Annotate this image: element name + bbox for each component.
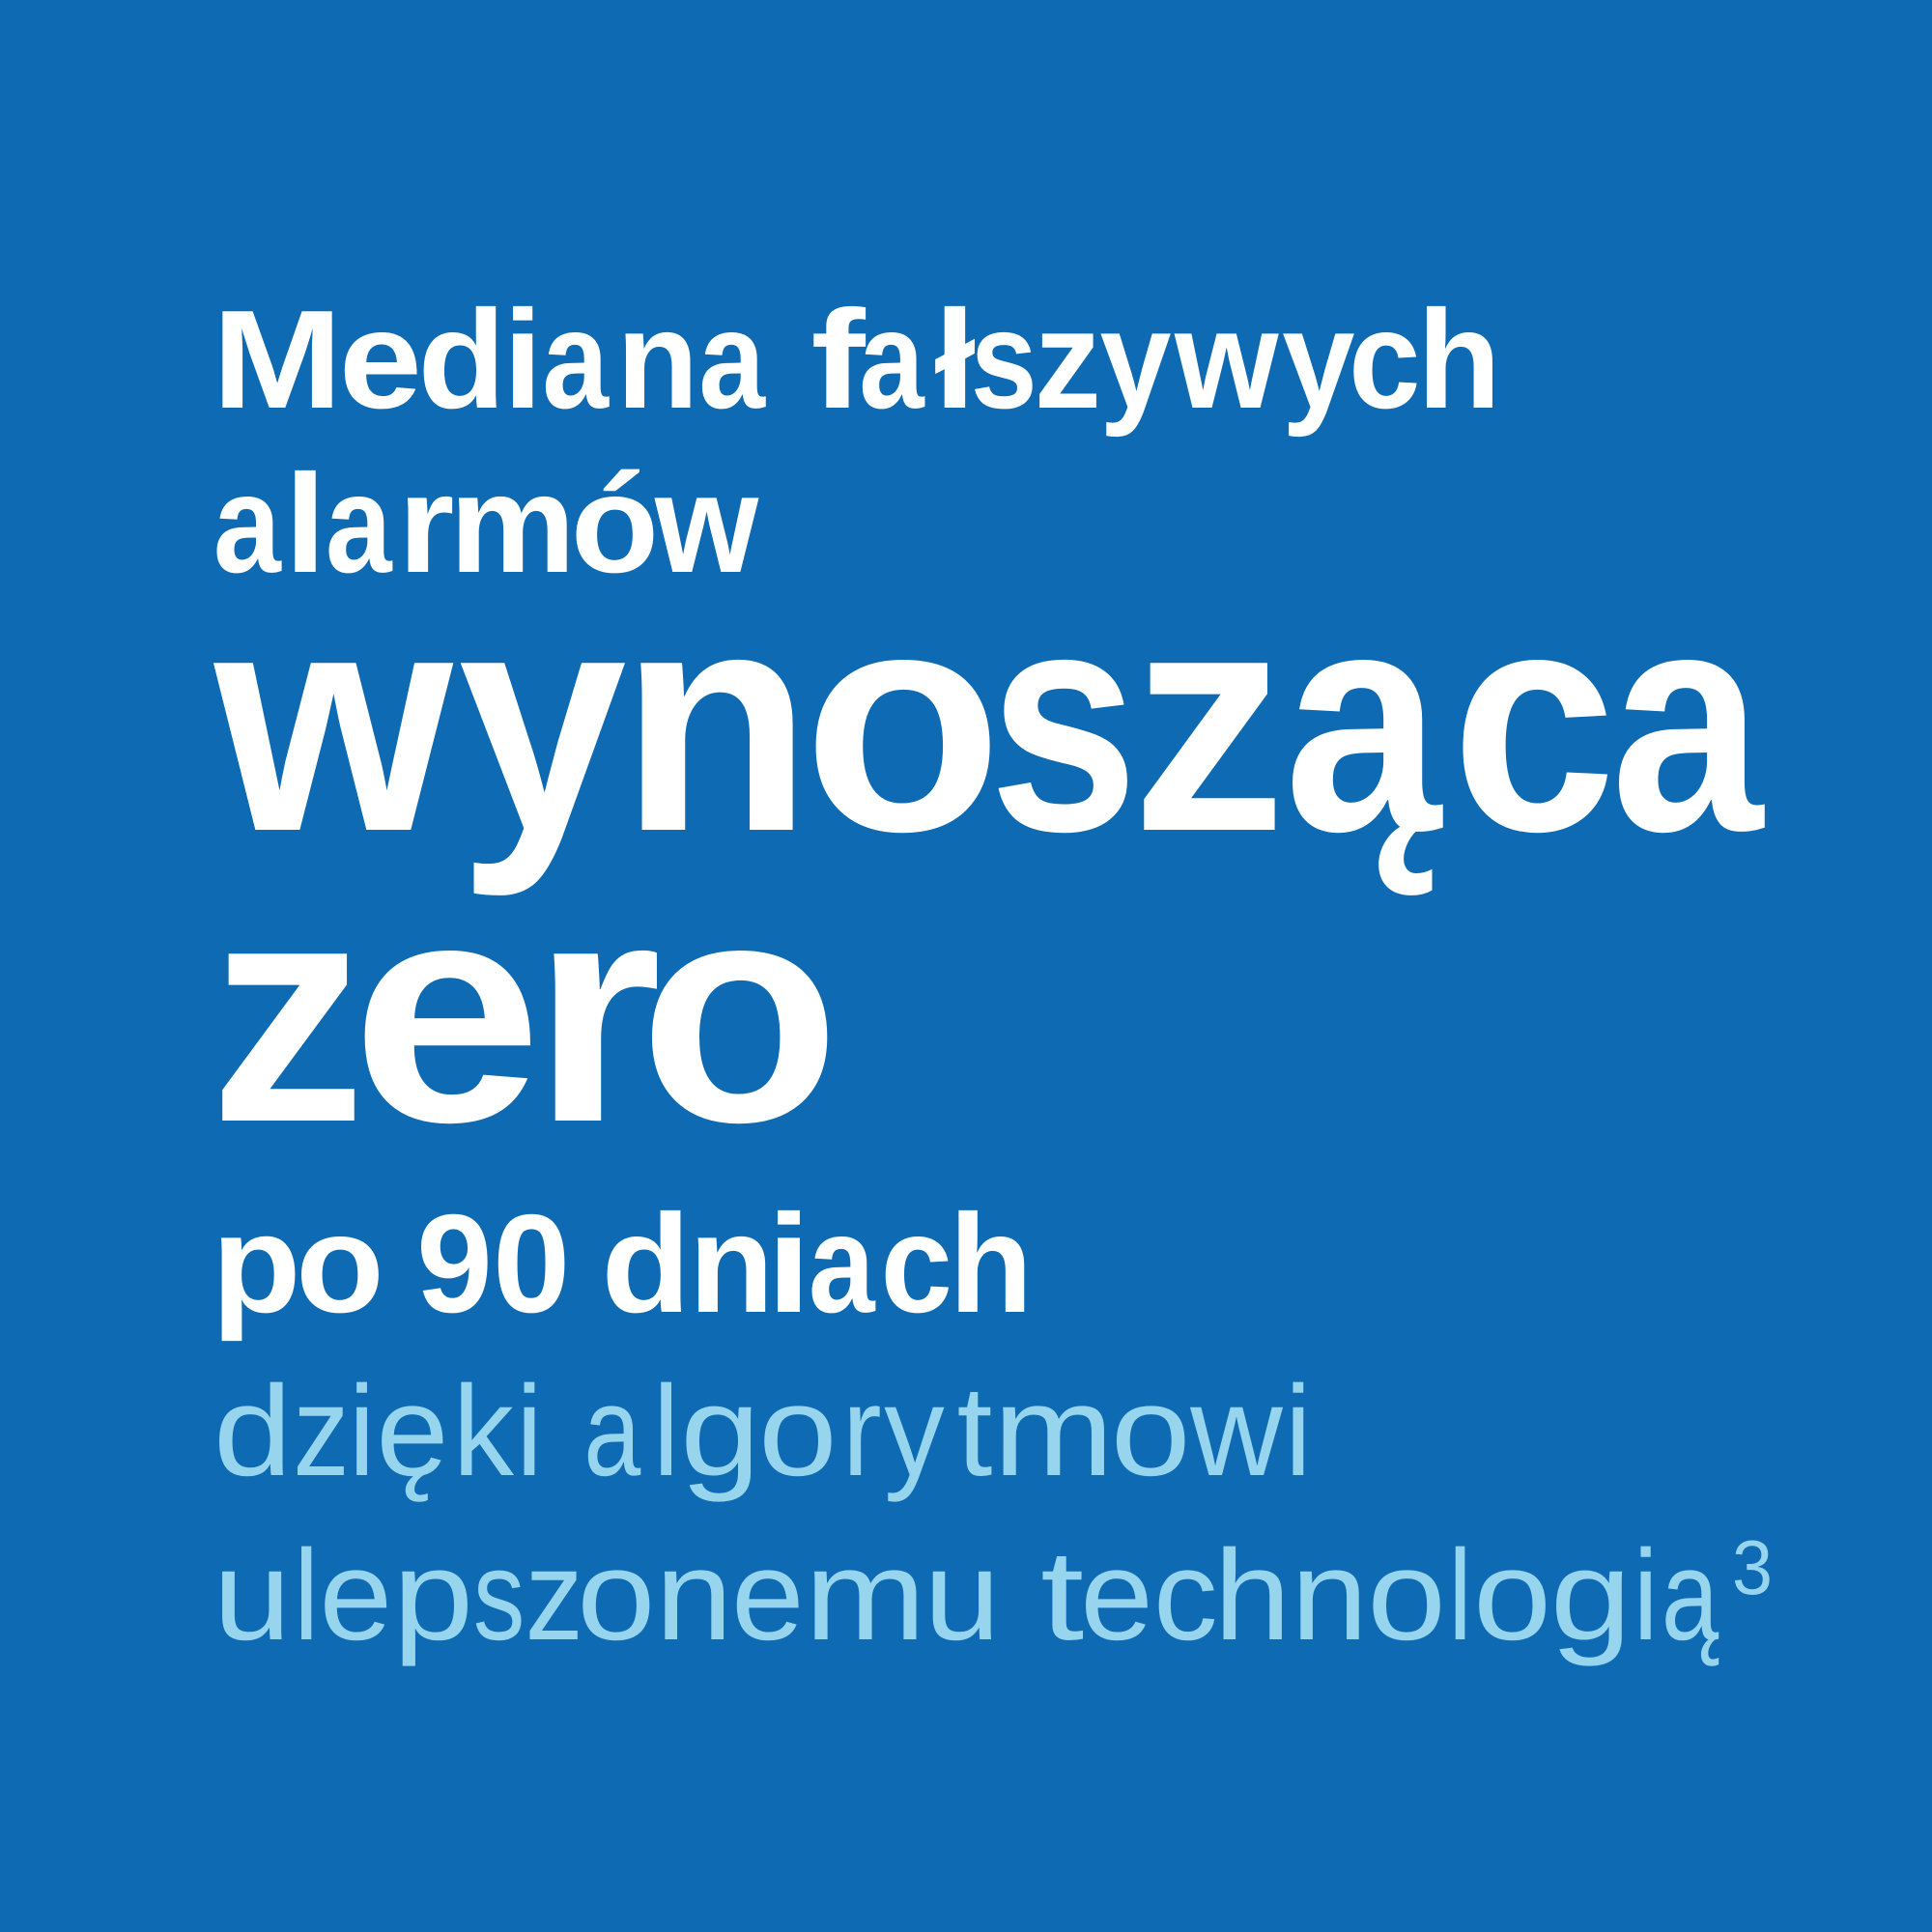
big statement line 1: s bbox=[989, 545, 1138, 897]
light text line 2: o bbox=[1367, 1524, 1446, 1667]
duration text: i bbox=[767, 1185, 811, 1342]
light text line 2: h bbox=[1214, 1524, 1291, 1667]
light text line 2: u bbox=[213, 1524, 291, 1667]
light text line 1: i bbox=[349, 1360, 375, 1503]
heading line 1: ł bbox=[934, 281, 976, 438]
light text line 1: w bbox=[1189, 1360, 1284, 1503]
heading line 2: m bbox=[449, 445, 576, 602]
duration text: o bbox=[296, 1185, 384, 1342]
light text line 2: t bbox=[1040, 1524, 1084, 1667]
light text line 2: o bbox=[1473, 1524, 1551, 1667]
light text line 2: l bbox=[294, 1524, 319, 1667]
big statement line 1: ą bbox=[1285, 545, 1443, 899]
heading line 2: r bbox=[398, 445, 454, 602]
big statement line 1: w bbox=[210, 545, 454, 897]
light text line 1: d bbox=[213, 1360, 292, 1503]
big statement line 1: a bbox=[1611, 545, 1765, 897]
light text line 2: n bbox=[655, 1524, 732, 1667]
heading line 1: a bbox=[859, 281, 925, 438]
heading line 1: h bbox=[1417, 281, 1501, 438]
heading line 1: n bbox=[616, 281, 698, 438]
big statement line 2: r bbox=[532, 836, 662, 1188]
heading line 1: w bbox=[1174, 281, 1280, 438]
big statement line 1: z bbox=[1132, 545, 1286, 897]
light text line 2: c bbox=[1153, 1524, 1218, 1667]
light text line 1: o bbox=[1111, 1360, 1191, 1503]
light text line 2: e bbox=[319, 1524, 392, 1667]
light text line 2: l bbox=[1448, 1524, 1472, 1667]
light text line 1: i bbox=[516, 1360, 543, 1503]
duration text: a bbox=[809, 1185, 876, 1342]
duration text: c bbox=[881, 1185, 952, 1342]
heading line 1: f bbox=[810, 281, 867, 438]
heading line 1: a bbox=[542, 281, 610, 438]
duration text: 9 bbox=[416, 1185, 493, 1342]
light text line 2: i bbox=[1634, 1524, 1659, 1667]
big statement line 2: o bbox=[639, 836, 840, 1188]
heading line 2: w bbox=[654, 445, 759, 602]
light text line 1: k bbox=[453, 1360, 514, 1503]
light text line 1: ę bbox=[376, 1360, 448, 1503]
light text line 1: o bbox=[758, 1360, 838, 1503]
big statement line 2: z bbox=[210, 836, 365, 1188]
heading line 1: e bbox=[339, 281, 422, 438]
light text line 2: e bbox=[1080, 1524, 1153, 1667]
duration text: p bbox=[212, 1185, 301, 1342]
big statement line 1: o bbox=[803, 545, 1003, 897]
light text line 2: z bbox=[526, 1524, 583, 1667]
heading line 1: y bbox=[1282, 281, 1355, 438]
light text line 1: l bbox=[653, 1360, 679, 1503]
light text line 1: g bbox=[680, 1360, 760, 1503]
heading line 1: i bbox=[503, 281, 543, 438]
light text line 2: p bbox=[393, 1524, 473, 1667]
light text line 1: r bbox=[842, 1360, 882, 1503]
light text line 2: n bbox=[1291, 1524, 1368, 1667]
light text line 2: m bbox=[805, 1524, 925, 1667]
light text line 1: z bbox=[293, 1360, 350, 1503]
heading line 1: a bbox=[698, 281, 766, 438]
big statement line 1: n bbox=[620, 545, 812, 897]
heading line 2: l bbox=[284, 445, 327, 602]
heading line 2: a bbox=[326, 445, 393, 602]
light text line 1: a bbox=[583, 1360, 640, 1503]
heading line 2: a bbox=[213, 445, 282, 602]
light text line 1: y bbox=[884, 1360, 945, 1503]
heading line 1: d bbox=[417, 281, 506, 438]
big statement line 1: c bbox=[1451, 545, 1616, 897]
heading line 1: c bbox=[1349, 281, 1420, 438]
big statement line 2: e bbox=[352, 836, 542, 1188]
heading line 1: s bbox=[971, 281, 1037, 438]
footnote marker: 3 bbox=[1732, 1524, 1773, 1610]
heading line 1: M bbox=[213, 281, 342, 438]
light text line 2: ą bbox=[1662, 1524, 1719, 1667]
duration text: 0 bbox=[493, 1185, 570, 1342]
heading line 2: ó bbox=[571, 445, 659, 602]
duration text: h bbox=[949, 1185, 1033, 1342]
light text line 2: g bbox=[1550, 1524, 1632, 1667]
light text line 2: e bbox=[731, 1524, 805, 1667]
heading line 1: z bbox=[1035, 281, 1101, 438]
duration text: n bbox=[689, 1185, 774, 1342]
light text line 2: u bbox=[923, 1524, 1000, 1667]
duration text: d bbox=[601, 1185, 691, 1342]
big statement line 1: y bbox=[458, 545, 629, 899]
light text line 1: t bbox=[956, 1360, 992, 1503]
light text line 1: m bbox=[993, 1360, 1114, 1503]
light text line 2: o bbox=[577, 1524, 655, 1667]
light text line 2: s bbox=[473, 1524, 525, 1667]
heading line 1: y bbox=[1099, 281, 1172, 438]
light text line 1: i bbox=[1285, 1360, 1312, 1503]
